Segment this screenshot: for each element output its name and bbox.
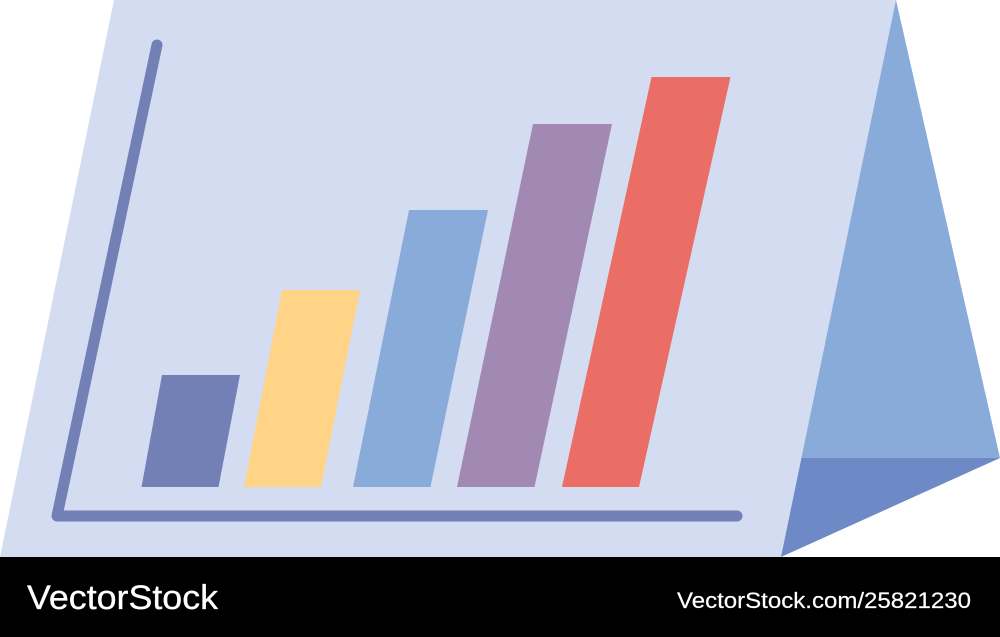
panel: card side shadow [770, 458, 1000, 557]
logo text: VectorStock [27, 579, 219, 617]
axes [57, 45, 737, 516]
panel: card front [0, 0, 896, 557]
bar 3 [353, 210, 488, 487]
bar 2 [244, 290, 360, 487]
panel: card side [790, 0, 1000, 458]
bar 1 [142, 375, 240, 487]
bar 4 [457, 124, 612, 487]
footer bar [0, 557, 1000, 637]
url text: VectorStock.com/25821230 [677, 588, 971, 613]
bar 5 [562, 77, 730, 487]
